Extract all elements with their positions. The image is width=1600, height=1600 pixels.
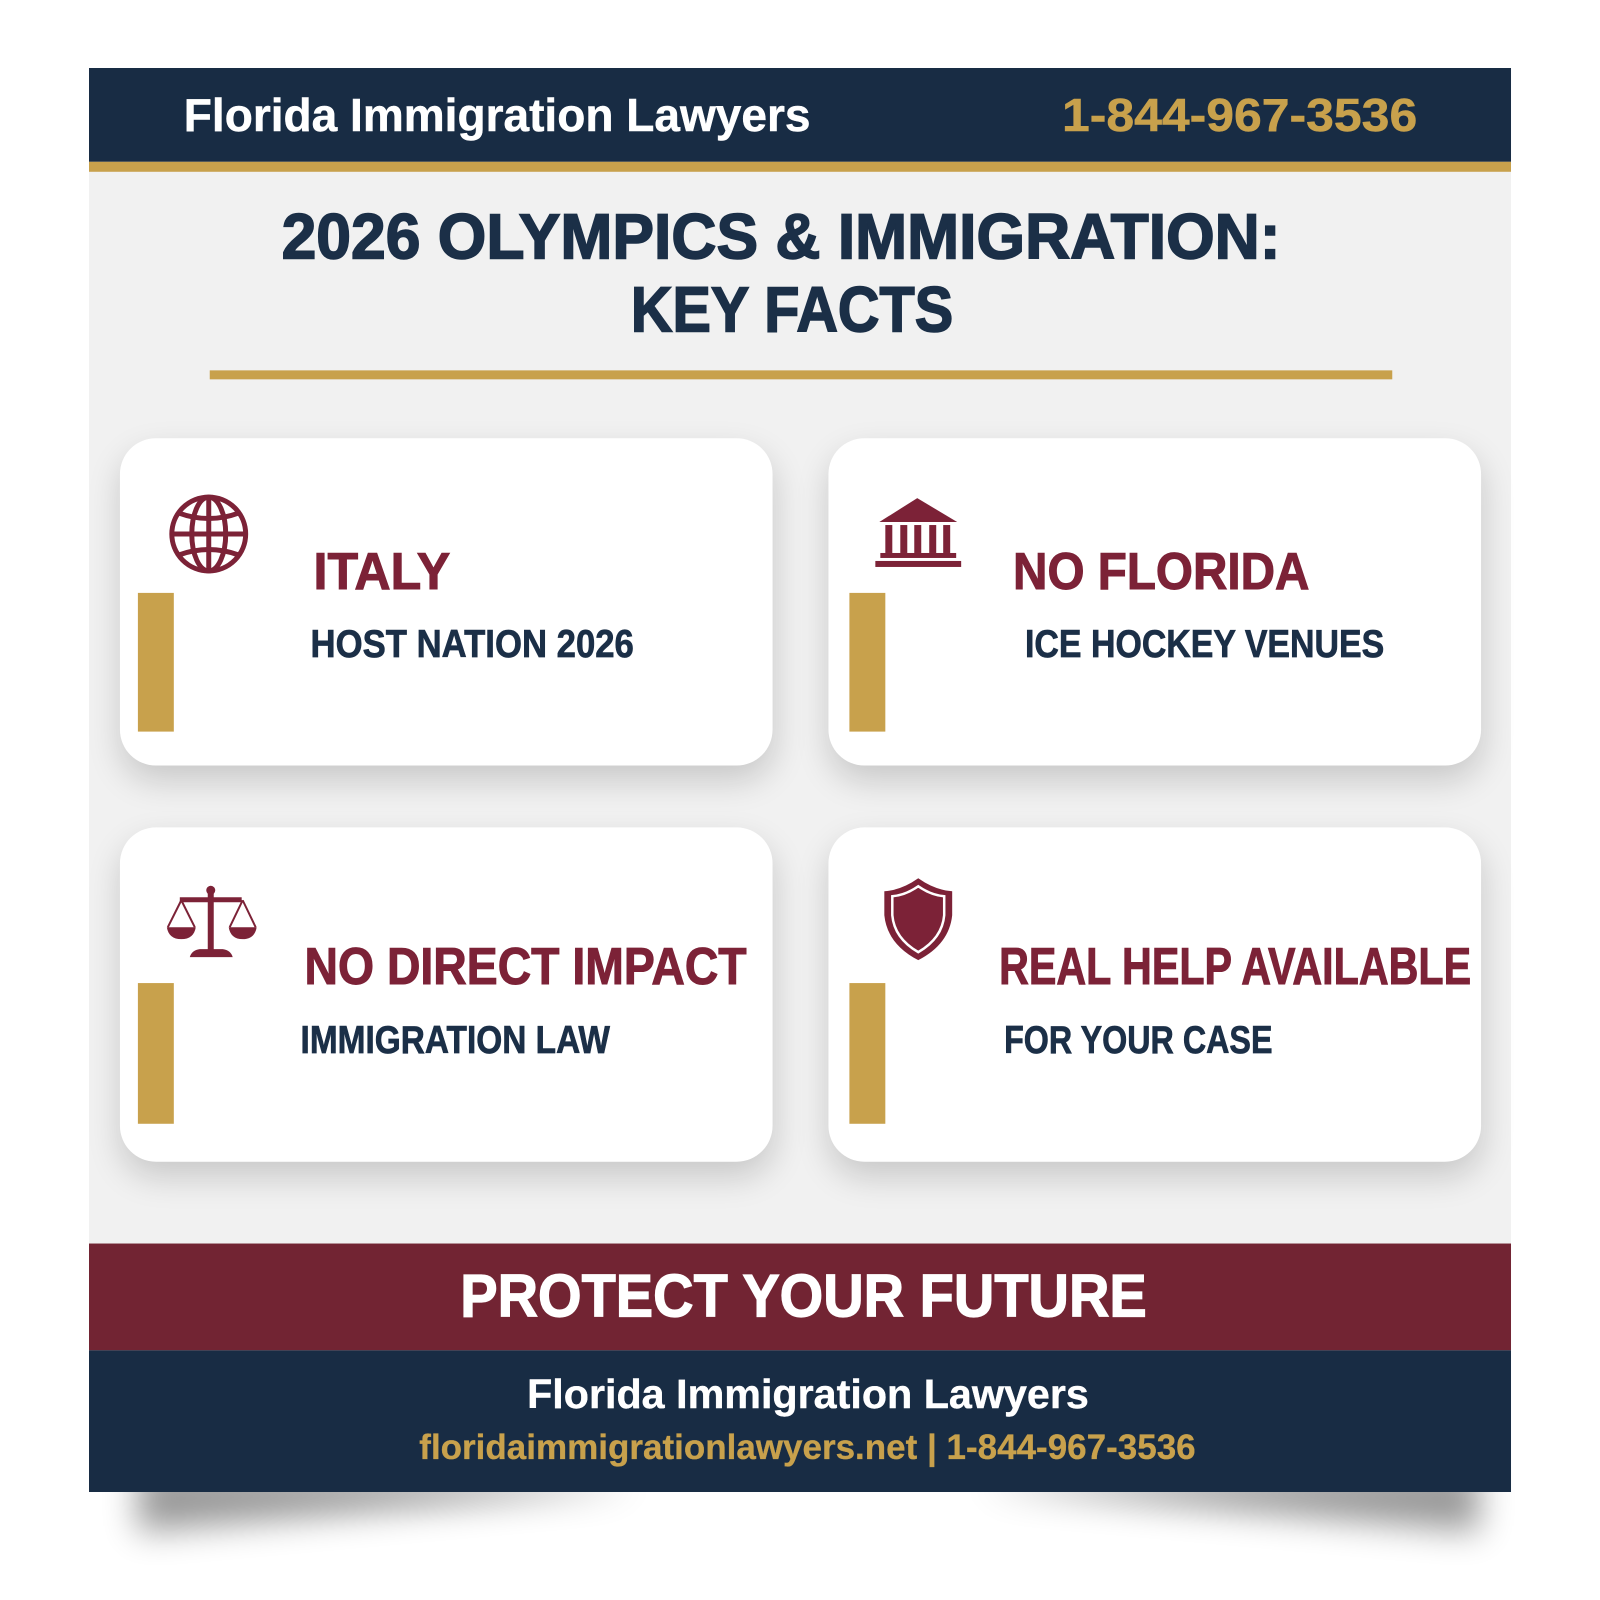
header bar (89, 68, 1511, 172)
card: Italy (120, 438, 774, 781)
footer (89, 1350, 1511, 1492)
icon: scales of justice (167, 886, 257, 957)
icon: globe (172, 497, 246, 571)
card: Real Help Available (828, 827, 1482, 1177)
icon: bank building (875, 498, 961, 567)
phone number: 1-844-967-3536 (1062, 89, 1417, 141)
footer contact: floridaimmigrationlawyers.net | 1-844-967-3536 (419, 1428, 1196, 1467)
footer firm name: Florida Immigration Lawyers (527, 1371, 1089, 1417)
accent bar (138, 593, 174, 732)
subtext: FOR YOUR CASE (1004, 1019, 1273, 1062)
icon: shield (884, 878, 952, 960)
title divider (210, 370, 1392, 379)
firm name: Florida Immigration Lawyers (184, 89, 810, 141)
subtext: HOST NATION 2026 (311, 623, 634, 666)
panel: background (89, 68, 1511, 1492)
subtext: IMMIGRATION LAW (301, 1019, 610, 1062)
heading: REAL HELP AVAILABLE (999, 937, 1471, 995)
banner: protect your future (89, 1244, 1511, 1350)
title: 2026 OLYMPICS & IMMIGRATION: (282, 201, 1280, 273)
title: KEY FACTS (631, 273, 953, 345)
subtext: ICE HOCKEY VENUES (1025, 623, 1384, 666)
banner: protect your future: PROTECT YOUR FUTURE (460, 1262, 1147, 1329)
heading: ITALY (314, 542, 450, 600)
card: No Direct Impact (120, 827, 774, 1177)
accent bar (849, 983, 885, 1124)
card: No Florida (828, 438, 1482, 781)
panel shadow (138, 1467, 1479, 1532)
heading: NO FLORIDA (1013, 542, 1309, 600)
heading: NO DIRECT IMPACT (305, 937, 747, 995)
title (282, 201, 1280, 345)
accent bar (138, 983, 174, 1124)
accent bar (849, 593, 885, 732)
